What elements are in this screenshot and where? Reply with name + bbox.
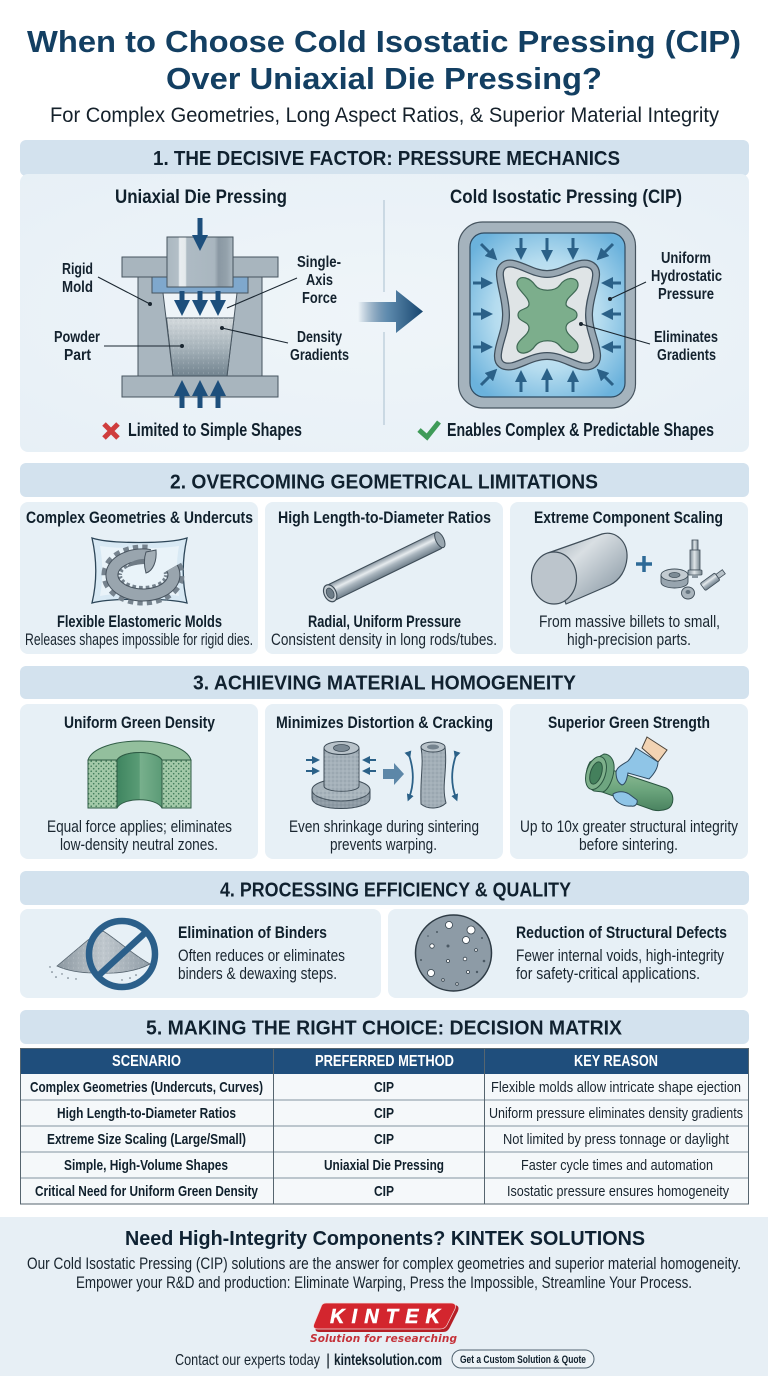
caption: limited shapes: Limited to Simple Shapes xyxy=(128,420,302,440)
icon: material cross-section with voids xyxy=(416,915,492,991)
section 3: material homogeneity xyxy=(20,666,749,859)
card: uniform green density: Equal force applies; eliminates xyxy=(47,818,232,836)
heading band: section 5 xyxy=(20,1010,749,1044)
card: complex geometries: Flexible Elastomeric Molds xyxy=(57,613,222,631)
card: reduction of defects: Reduction of Structural Defects xyxy=(516,923,727,942)
contact line xyxy=(175,1352,442,1369)
label: uniform hydrostatic pressure xyxy=(651,250,722,303)
icon: billet and small parts xyxy=(532,533,726,604)
card: distortion and cracking xyxy=(265,704,503,859)
card: reduction of defects: for safety-critical applications. xyxy=(516,965,700,983)
title: When to Choose Cold Isostatic Pressing (CIP) xyxy=(27,24,741,59)
label: powder part: Powder xyxy=(54,329,100,346)
card: extreme component scaling: Extreme Component Scaling xyxy=(534,508,723,527)
label: single-axis force: Force xyxy=(302,290,337,307)
label: uniform hydrostatic pressure: Uniform xyxy=(661,250,711,267)
card: elimination of binders: Elimination of Binders xyxy=(178,923,327,942)
heading band: section 3 xyxy=(20,666,749,699)
table rows xyxy=(20,1048,748,1204)
diagram: uniaxial die xyxy=(122,237,278,397)
card: high length-to-diameter: Consistent density in long rods/tubes. xyxy=(271,631,497,649)
label: single-axis force: Axis xyxy=(306,272,333,289)
icon: green check xyxy=(419,422,439,437)
heading band: section 2: 2. OVERCOMING GEOMETRICAL LIMITATIONS xyxy=(170,470,598,494)
table: decision matrix xyxy=(20,1048,748,1204)
leader lines: CIP xyxy=(579,282,650,344)
heading: uniaxial: Uniaxial Die Pressing xyxy=(115,187,287,208)
heading: CIP: Cold Isostatic Pressing (CIP) xyxy=(450,187,682,208)
heading band: section 1: 1. THE DECISIVE FACTOR: PRESSURE MECHANICS xyxy=(153,147,620,170)
footer heading: Need High-Integrity Components? KINTEK SOLUTIONS xyxy=(125,1228,645,1250)
card: elimination of binders xyxy=(20,909,381,998)
icon: powder pile with prohibition sign xyxy=(49,921,155,987)
table rows: Extreme Size Scaling (Large/Small) xyxy=(47,1131,246,1148)
table rows: Isostatic pressure ensures homogeneity xyxy=(507,1183,729,1200)
heading band: section 4 xyxy=(20,871,749,905)
card: distortion and cracking: prevents warping. xyxy=(330,836,437,854)
table header row: SCENARIO xyxy=(112,1053,181,1070)
card: superior green strength: Superior Green Strength xyxy=(548,713,710,732)
heading band: section 4: 4. PROCESSING EFFICIENCY & QUALITY xyxy=(220,878,571,902)
arrows: hydrostatic pressure xyxy=(473,238,621,392)
leader lines: uniaxial xyxy=(98,277,297,348)
section 5: decision matrix xyxy=(20,1010,749,1204)
panel: pressure mechanics xyxy=(20,174,749,452)
card: high length-to-diameter: High Length-to-Diameter Ratios xyxy=(278,508,491,527)
icon: green cross-section xyxy=(88,741,191,808)
label: density gradients xyxy=(290,329,349,364)
section 2: geometrical limitations xyxy=(20,463,749,654)
card: extreme component scaling: From massive billets to small, xyxy=(539,613,720,631)
logo: KINTEK: KINTEK xyxy=(330,1306,442,1328)
table rows: High Length-to-Diameter Ratios xyxy=(57,1105,236,1122)
uniaxial column xyxy=(54,187,349,440)
heading band: section 2 xyxy=(20,463,749,497)
label: rigid mold: Rigid xyxy=(62,261,93,278)
title: Over Uniaxial Die Pressing? xyxy=(166,61,602,96)
card: high length-to-diameter xyxy=(265,502,503,654)
icon: gear in flexible mold xyxy=(92,538,187,603)
card: extreme component scaling: high-precision parts. xyxy=(567,631,691,649)
table rows: CIP xyxy=(374,1079,394,1096)
card: high length-to-diameter: Radial, Uniform Pressure xyxy=(308,613,461,631)
diagram: CIP vessel xyxy=(458,222,636,408)
table rows: Simple, High-Volume Shapes xyxy=(64,1157,228,1174)
card: superior green strength xyxy=(510,704,748,859)
card: uniform green density xyxy=(20,704,258,859)
logo: KINTEK xyxy=(310,1303,458,1345)
section 1: pressure mechanics xyxy=(20,140,749,452)
table header row: KEY REASON xyxy=(574,1053,658,1070)
card: uniform green density: low-density neutral zones. xyxy=(60,836,218,854)
button: custom solution quote xyxy=(452,1350,594,1368)
label: density gradients: Density xyxy=(297,329,342,346)
contact line: Contact our experts today xyxy=(175,1352,320,1369)
icon: flanged part and warped tube xyxy=(306,742,456,808)
table rows: CIP xyxy=(374,1183,394,1200)
contact line: | xyxy=(326,1352,330,1369)
table rows: Faster cycle times and automation xyxy=(521,1157,713,1174)
subtitle: For Complex Geometries, Long Aspect Ratios, & Superior Material Integrity xyxy=(50,104,719,127)
table header row xyxy=(20,1048,748,1074)
icon: red cross xyxy=(104,424,118,438)
label: eliminates gradients xyxy=(654,329,718,364)
footer: call to action xyxy=(0,1217,768,1376)
button: custom solution quote: Get a Custom Solution & Quote xyxy=(460,1354,586,1366)
heading band: section 5: 5. MAKING THE RIGHT CHOICE: DECISION MATRIX xyxy=(146,1016,622,1040)
label: density gradients: Gradients xyxy=(290,347,349,364)
heading band: section 3: 3. ACHIEVING MATERIAL HOMOGENEITY xyxy=(193,672,576,694)
card: distortion and cracking: Even shrinkage during sintering xyxy=(289,818,479,836)
card: elimination of binders: binders & dewaxing steps. xyxy=(178,965,337,983)
label: eliminates gradients: Gradients xyxy=(657,347,716,364)
table header row: PREFERRED METHOD xyxy=(315,1053,454,1070)
arrow: comparison xyxy=(358,290,423,333)
table rows: CIP xyxy=(374,1105,394,1122)
header block xyxy=(27,24,741,127)
table rows: Uniaxial Die Pressing xyxy=(324,1157,444,1174)
label: eliminates gradients: Eliminates xyxy=(654,329,718,346)
card: extreme component scaling xyxy=(510,502,748,654)
label: single-axis force xyxy=(297,254,341,307)
label: rigid mold: Mold xyxy=(62,279,93,296)
table rows: Not limited by press tonnage or daylight xyxy=(503,1131,730,1148)
table rows: Critical Need for Uniform Green Density xyxy=(35,1183,259,1200)
logo: KINTEK: Solution for researching xyxy=(310,1333,457,1345)
shape: green part xyxy=(517,278,578,353)
card: superior green strength: before sintering. xyxy=(579,836,678,854)
divider xyxy=(383,200,385,425)
CIP column xyxy=(419,187,722,440)
footer body text xyxy=(27,1255,741,1292)
card: distortion and cracking: Minimizes Distortion & Cracking xyxy=(276,713,493,732)
title xyxy=(27,24,741,96)
heading band: section 1 xyxy=(20,140,749,176)
icon: gloved hand holding green tube xyxy=(582,737,673,811)
card: complex geometries: Releases shapes impossible for rigid dies. xyxy=(25,631,253,649)
contact line: kinteksolution.com xyxy=(334,1352,442,1369)
card: elimination of binders: Often reduces or eliminates xyxy=(178,947,345,965)
card: uniform green density: Uniform Green Density xyxy=(64,713,215,732)
table rows: Complex Geometries (Undercuts, Curves) xyxy=(30,1079,263,1096)
icon: long tube xyxy=(321,530,447,604)
label: uniform hydrostatic pressure: Pressure xyxy=(658,286,714,303)
card: reduction of defects: Fewer internal voids, high-integrity xyxy=(516,947,725,965)
card: complex geometries xyxy=(20,502,258,654)
label: single-axis force: Single- xyxy=(297,254,341,271)
label: rigid mold xyxy=(62,261,93,296)
card: complex geometries: Complex Geometries & Undercuts xyxy=(26,508,253,527)
table rows: CIP xyxy=(374,1131,394,1148)
arrows: uniaxial force xyxy=(182,218,218,408)
label: powder part xyxy=(54,329,100,364)
label: uniform hydrostatic pressure: Hydrostatic xyxy=(651,268,722,285)
card: reduction of defects xyxy=(388,909,748,998)
label: powder part: Part xyxy=(64,347,92,364)
section 4: processing efficiency xyxy=(20,871,749,998)
